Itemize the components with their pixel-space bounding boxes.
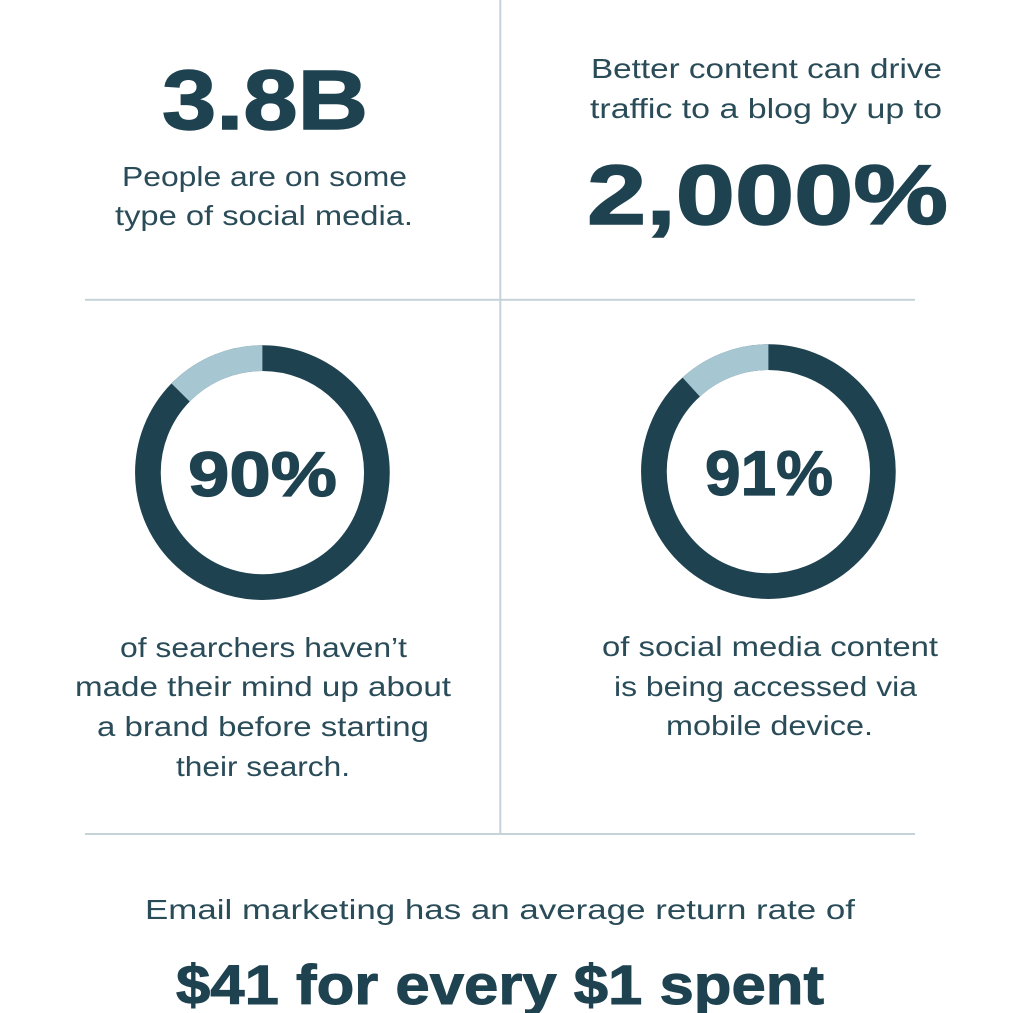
donut chart: 91% bbox=[654, 344, 883, 586]
panel: 3.8B people on social media bbox=[115, 53, 413, 231]
text: searchers description bbox=[75, 632, 451, 782]
panel: 90% of searchers bbox=[75, 345, 451, 782]
text: searchers description: their search. bbox=[176, 751, 350, 782]
text: people on social media: type of social media. bbox=[115, 200, 413, 231]
text: people on social media bbox=[115, 161, 413, 231]
text: email marketing intro: Email marketing has an average return rate of bbox=[145, 894, 855, 925]
stat: 3.8B: 3.8B bbox=[162, 53, 368, 147]
text: mobile access description: mobile device. bbox=[666, 710, 873, 741]
text: people on social media: People are on some bbox=[122, 161, 407, 192]
donut chart: 90% bbox=[148, 345, 377, 587]
stat: 2,000%: 2,000% bbox=[587, 148, 948, 242]
text: better content drives traffic: traffic to a blog by up to bbox=[590, 93, 942, 124]
panel: blog traffic 2,000% bbox=[587, 53, 948, 242]
text: better content drives traffic: Better content can drive bbox=[591, 53, 942, 84]
text: mobile access description bbox=[602, 631, 938, 741]
text: searchers description: made their mind up about bbox=[75, 671, 451, 702]
text: searchers description: a brand before starting bbox=[97, 711, 429, 742]
text: mobile access description: of social media content bbox=[602, 631, 938, 662]
stat: 90%: 90% bbox=[188, 440, 337, 510]
panel: 91% of social media content bbox=[602, 344, 938, 741]
text: better content drives traffic bbox=[590, 53, 942, 124]
text: searchers description: of searchers haven’t bbox=[120, 632, 407, 663]
text: mobile access description: is being accessed via bbox=[614, 671, 917, 702]
panel: email marketing return bbox=[145, 894, 855, 1013]
stat: 91%: 91% bbox=[705, 439, 833, 509]
